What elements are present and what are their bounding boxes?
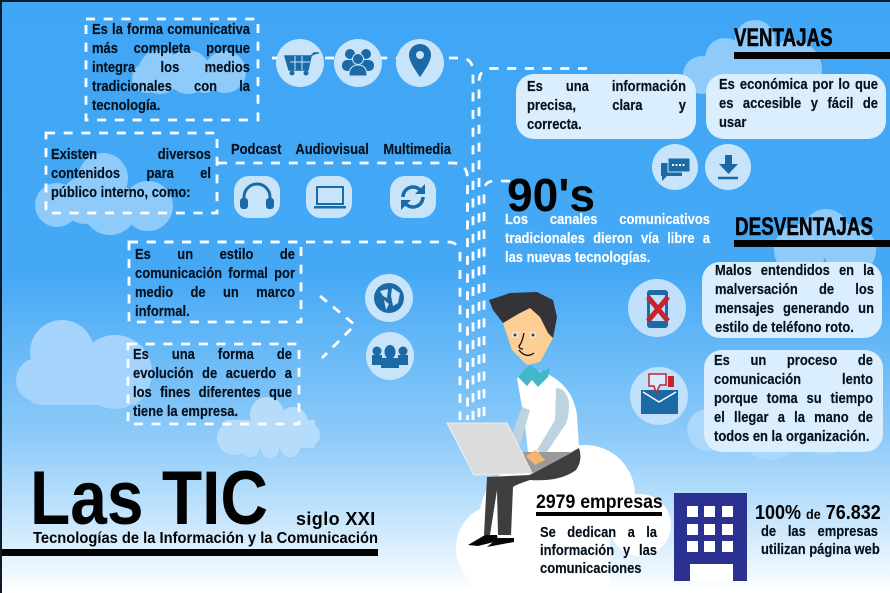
title bar: [2, 549, 378, 556]
text: de las empresas: utilizan página web: [761, 542, 880, 558]
text: desventaja 1: mensajes generando un: [715, 301, 874, 317]
text: forma comunicativa: [92, 22, 250, 114]
text: forma de evolución: tiene la empresa.: [133, 404, 238, 420]
text: estilo de comunicación: [135, 247, 295, 320]
icon: location pin: [396, 39, 444, 87]
text: ventaja 1: correcta.: [527, 117, 582, 133]
text: de las empresas: [761, 524, 880, 558]
text: estilo de comunicación: Es un estilo de: [135, 247, 295, 263]
cloud: lower right: [687, 363, 855, 460]
text: los canales: [505, 212, 710, 266]
icon: globe: [365, 274, 413, 322]
dashed text boxes: [46, 19, 301, 424]
text: contenidos: [51, 147, 211, 201]
cloud: under fourth box: [217, 397, 320, 458]
cloud: behind second text box: [35, 153, 173, 235]
text: desventaja 2: todos en la organización.: [714, 429, 869, 445]
arrow: dashed chevron: [320, 296, 355, 358]
text: ventaja 2: es accesible y fácil de: [719, 96, 878, 112]
text: ventaja 2: Es económica por lo que: [719, 77, 878, 93]
text: los canales: tradicionales dieron vía libre a: [505, 231, 710, 247]
text: forma comunicativa: tradicionales con la: [92, 79, 250, 95]
text: de las empresas: de las empresas: [761, 524, 878, 540]
text: contenidos: público interno, como:: [51, 185, 191, 201]
text: ventaja 2: usar: [719, 115, 746, 131]
illustration: person with laptop: [447, 292, 580, 547]
text: ventaja 1: precisa, clara y: [527, 98, 686, 114]
labels: content types: Podcast Audiovisual Multimedia: [231, 142, 451, 158]
cloud: behind ventajas: [683, 20, 822, 100]
text: se dedican: información y las: [540, 543, 657, 559]
text: forma comunicativa: integra los medios: [92, 60, 250, 76]
text: ventaja 1: Es una información: [527, 79, 686, 95]
text: forma comunicativa: tecnología.: [92, 98, 160, 114]
90's heading: 90's: [507, 169, 595, 221]
subtitle: tecnologías: Tecnologías de la Información y la Comunicación: [33, 530, 378, 547]
text: contenidos: Existen diversos: [51, 147, 211, 163]
heading: ventajas: VENTAJAS: [734, 24, 833, 52]
icon: user group: [366, 332, 414, 380]
ventajas heading bar: [734, 52, 890, 59]
cloud: behind desventajas: [774, 209, 876, 276]
text: forma de evolución: [133, 347, 292, 420]
icon: people: [334, 39, 382, 87]
text: los canales: Los canales comunicativos: [505, 212, 710, 228]
text: forma comunicativa: más completa porque: [92, 41, 250, 57]
text: desventaja 2: el llegar a la mano de: [714, 410, 873, 426]
icon: cart: [276, 39, 324, 87]
text: los canales: las nuevas tecnologías.: [505, 250, 650, 266]
cloud: white under person: [456, 445, 671, 593]
icon: building: [674, 493, 747, 581]
cloud: lower left: [16, 320, 152, 409]
heading: desventajas: DESVENTAJAS: [735, 212, 873, 240]
heading: 2979 empresas: 2979 empresas: [536, 492, 663, 513]
icon: headphones: [234, 176, 280, 218]
text: se dedican: [540, 525, 658, 577]
stat: 100% de 76.832: 100% de 76.832: [755, 502, 881, 524]
bubbles: [516, 74, 886, 452]
dashed connector lines: [129, 58, 587, 420]
icon: laptop: [306, 176, 352, 218]
text: forma comunicativa: Es la forma comunicativa: [92, 22, 250, 38]
bar: 2979 empresas underline: [536, 512, 662, 516]
text: desventaja 1: estilo de teléfono roto.: [715, 320, 854, 336]
text: ventaja 2: [719, 77, 878, 131]
text: estilo de comunicación: informal.: [135, 304, 190, 320]
text: forma de evolución: evolución de acuerdo a: [133, 366, 292, 382]
text: se dedican: comunicaciones: [540, 561, 641, 577]
text: contenidos: contenidos para el: [51, 166, 211, 182]
text: desventaja 2: Es un proceso de: [714, 353, 873, 369]
text: estilo de comunicación: medio de un marco: [135, 285, 295, 301]
cloud: behind first text box: [132, 50, 246, 94]
subtitle: siglo XXI: siglo XXI: [296, 509, 376, 529]
icon: sync arrows: [390, 176, 436, 218]
text: forma de evolución: los fines diferentes que: [133, 385, 292, 401]
text: forma de evolución: Es una forma de: [133, 347, 292, 363]
icon: download: [705, 144, 751, 190]
icon: broken phone: [628, 279, 686, 337]
text: desventaja 2: comunicación lento: [714, 372, 873, 388]
text: se dedican: Se dedican a la: [540, 525, 657, 541]
text: desventaja 2: [714, 353, 873, 445]
text: estilo de comunicación: comunicación formal por: [135, 266, 295, 282]
title: Las TIC: Las TIC: [30, 456, 268, 541]
text: desventaja 1: malversación de los: [715, 282, 874, 298]
text: desventaja 2: porque toma su tiempo: [714, 391, 873, 407]
text: ventaja 1: [527, 79, 686, 133]
desventajas heading bar: [734, 240, 890, 247]
text: desventaja 1: Malos entendidos en la: [715, 263, 874, 279]
icon: chat: [652, 144, 698, 190]
text: desventaja 1: [715, 263, 874, 336]
icon: mail with thumbs down: [630, 367, 688, 425]
